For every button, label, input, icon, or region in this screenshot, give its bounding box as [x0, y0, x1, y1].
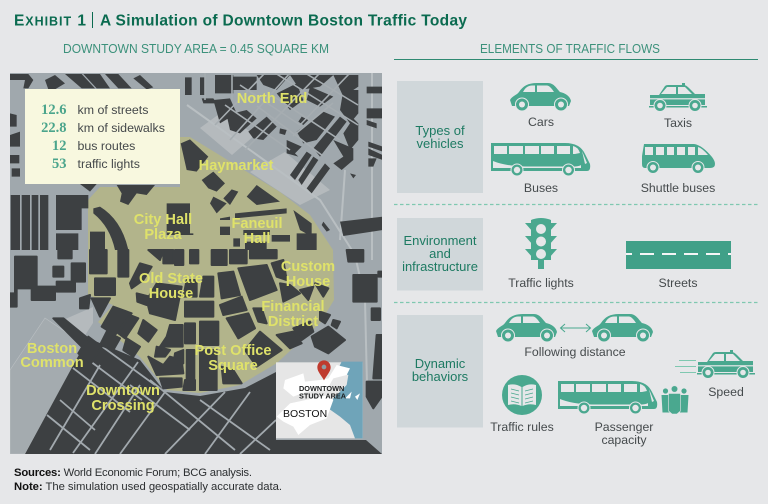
callout: study area statistics: 53	[52, 156, 66, 172]
study area	[88, 137, 334, 393]
source notes: Sources: World Economic Forum; BCG analysis.	[14, 467, 252, 479]
label: passenger capacity	[595, 420, 653, 447]
panel: environment and infrastructure: and	[429, 246, 451, 261]
map place labels: Downtown	[86, 383, 160, 399]
label: passenger capacity: capacity	[601, 433, 647, 447]
panel: types of vehicles: vehicles	[417, 136, 464, 151]
light open plots	[66, 116, 330, 335]
inset locator map: STUDY AREA	[299, 392, 347, 400]
label: traffic rules: Traffic rules	[490, 420, 554, 434]
icon: shuttle bus	[642, 144, 715, 174]
panel: dynamic behaviors	[397, 315, 483, 428]
main roads	[187, 73, 372, 385]
label: shuttle buses: Shuttle buses	[641, 181, 715, 195]
panel: environment and infrastructure: Environment	[404, 233, 477, 248]
title: A Simulation of Downtown Boston Traffic Today	[100, 12, 467, 30]
streets crossing the lower-left blocks	[47, 345, 276, 454]
title: EXHIBIT 1	[14, 12, 86, 30]
inset locator map: BOSTON	[283, 408, 327, 420]
map place labels: District	[268, 314, 318, 330]
label: taxis: Taxis	[664, 116, 692, 130]
icon: passengers	[662, 386, 688, 414]
map place labels: House	[149, 286, 193, 302]
icon: traffic light	[525, 218, 557, 269]
label: streets: Streets	[659, 276, 697, 290]
icon: street	[626, 241, 731, 269]
map place labels: Faneuil	[231, 216, 283, 232]
label: speed: Speed	[708, 385, 744, 399]
label: traffic lights: Traffic lights	[508, 276, 574, 290]
map place labels: North End	[237, 91, 307, 107]
icon: car	[510, 83, 571, 111]
icon: following car, front	[592, 314, 653, 342]
inset locator map: DOWNTOWN	[299, 384, 344, 393]
inset locator map	[276, 360, 363, 438]
map place labels: Plaza	[144, 227, 183, 243]
icon: bus	[491, 143, 590, 176]
label: cars: Cars	[528, 115, 554, 129]
callout: study area statistics: 12.6	[41, 102, 66, 118]
callout: study area statistics: km of sidewalks	[78, 121, 165, 135]
panel: types of vehicles: Types of	[415, 123, 465, 138]
label: passenger capacity: Passenger	[595, 420, 653, 434]
central and lower map blocks	[10, 250, 383, 408]
icon: bus with capacity	[558, 381, 657, 414]
upper map blocks	[10, 74, 383, 250]
streets through the North End blocks	[205, 73, 358, 156]
map place labels	[20, 91, 335, 414]
dark mass of the lower-left blocks	[25, 338, 276, 454]
map place labels: City Hall	[134, 212, 192, 228]
panel: dynamic behaviors: Dynamic	[415, 356, 466, 371]
map place labels: Common	[20, 355, 84, 371]
map place labels: Boston	[27, 341, 77, 357]
map place labels: House	[286, 274, 330, 290]
icon: speeding taxi	[675, 350, 755, 378]
callout: study area statistics: km of streets	[78, 103, 148, 117]
panel: environment and infrastructure: infrastructure	[402, 259, 478, 274]
map place labels: Custom	[281, 259, 335, 275]
map place labels: Old State	[139, 271, 203, 287]
callout: study area statistics: 22.8	[41, 120, 66, 136]
source notes	[14, 467, 282, 493]
arrow: following distance	[560, 324, 590, 332]
panel: environment and infrastructure	[397, 218, 483, 290]
map place labels: Square	[208, 358, 258, 374]
icon: following car, rear	[496, 314, 557, 342]
heading: downtown study area: DOWNTOWN STUDY AREA = 0.45 SQUARE KM	[63, 42, 329, 56]
icon: rule book	[502, 375, 542, 415]
callout: study area statistics: traffic lights	[78, 157, 140, 171]
map place labels: Crossing	[91, 398, 155, 414]
icon: taxi	[649, 83, 707, 112]
map place labels: Post Office	[194, 343, 272, 359]
map place labels: Haymarket	[199, 158, 273, 174]
Boston Common park area	[10, 318, 66, 454]
panel: map of downtown Boston	[10, 73, 383, 454]
map place labels: Financial	[261, 299, 325, 315]
label: following distance: Following distance	[524, 345, 626, 359]
heading: elements of traffic flows: ELEMENTS OF TRAFFIC FLOWS	[480, 42, 660, 56]
callout: study area statistics	[25, 89, 180, 184]
panel: dynamic behaviors: behaviors	[412, 369, 469, 384]
callout: study area statistics: bus routes	[78, 139, 135, 153]
callout: study area statistics: 12	[52, 138, 66, 154]
label: buses: Buses	[524, 181, 558, 195]
source notes: Note: The simulation used geospatially accurate data.	[14, 481, 282, 493]
map place labels: Hall	[244, 231, 270, 247]
panel: types of vehicles	[397, 81, 483, 193]
